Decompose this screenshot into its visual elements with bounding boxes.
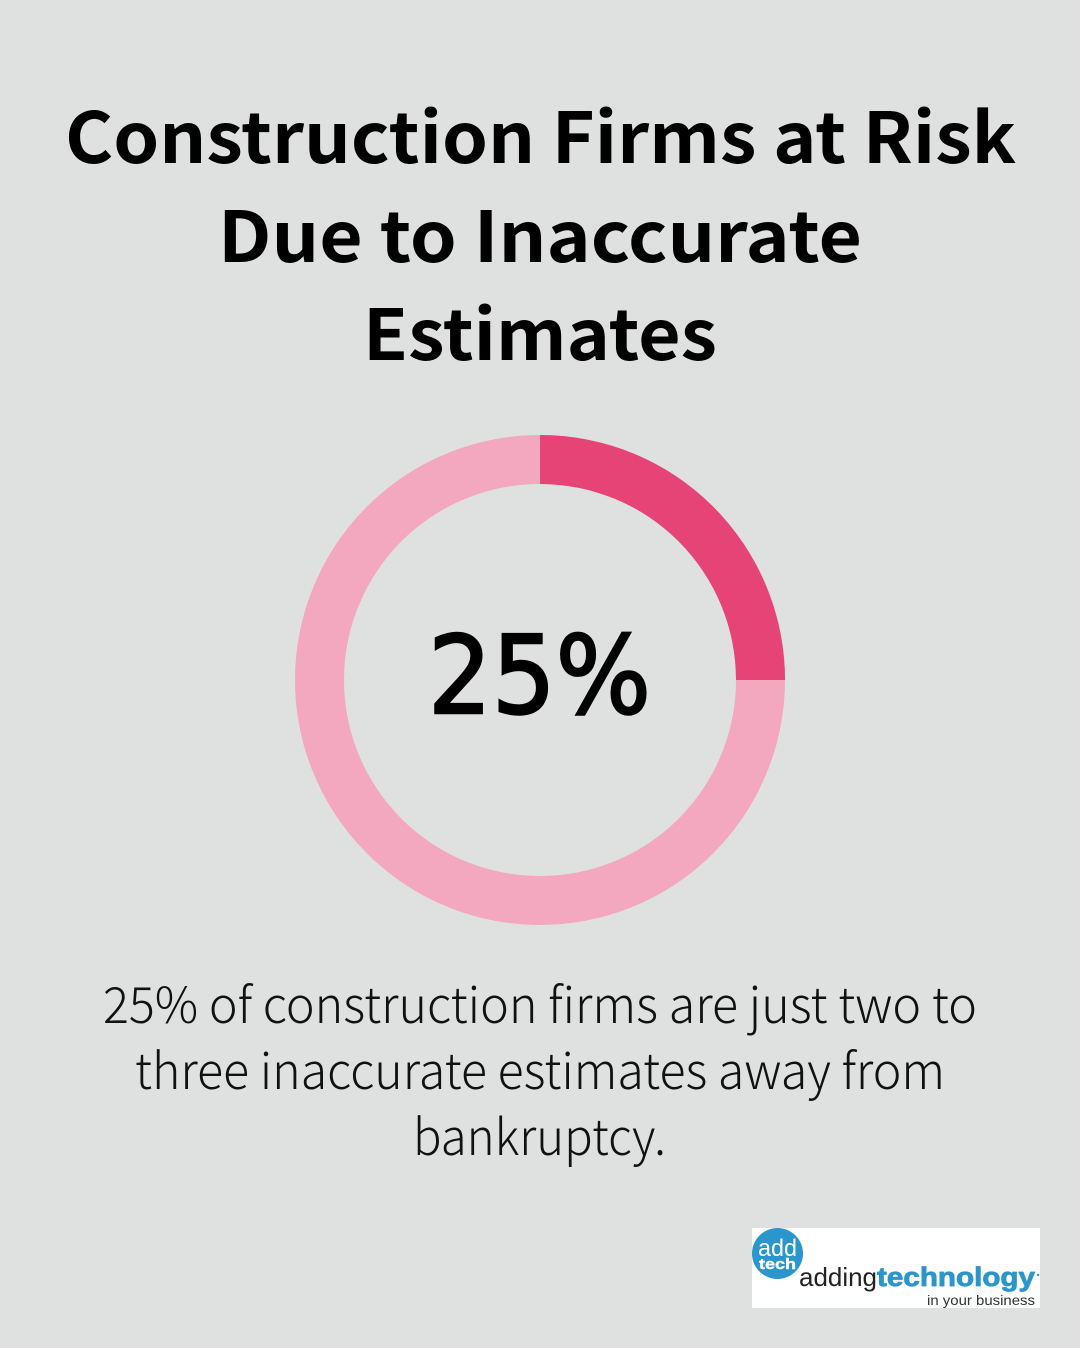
- logo badge: tech: [759, 1256, 796, 1273]
- donut chart: 25%: [320, 435, 785, 900]
- description text: 25% of construction firms are just two to: [103, 966, 977, 1038]
- logo wordmark: [799, 1262, 1039, 1292]
- logo background: [752, 1228, 1040, 1308]
- title: [65, 83, 1016, 381]
- logo tagline: in your business: [927, 1292, 1035, 1308]
- logo wordmark: technology: [877, 1262, 1035, 1292]
- donut value: 25%: [428, 614, 651, 739]
- logo: adding technology: [752, 1228, 1040, 1308]
- description text: bankruptcy.: [413, 1098, 666, 1170]
- logo badge: add: [758, 1235, 797, 1262]
- description text: three inaccurate estimates away from: [135, 1032, 945, 1104]
- title: Due to Inaccurate: [218, 182, 862, 283]
- donut segment: 25%: [540, 435, 785, 680]
- logo badge: [752, 1228, 803, 1279]
- description text: [103, 966, 977, 1170]
- logo wordmark: adding: [799, 1262, 877, 1292]
- title: Construction Firms at Risk: [65, 83, 1016, 184]
- donut track: remaining 75%: [320, 460, 760, 900]
- title: Estimates: [363, 280, 717, 381]
